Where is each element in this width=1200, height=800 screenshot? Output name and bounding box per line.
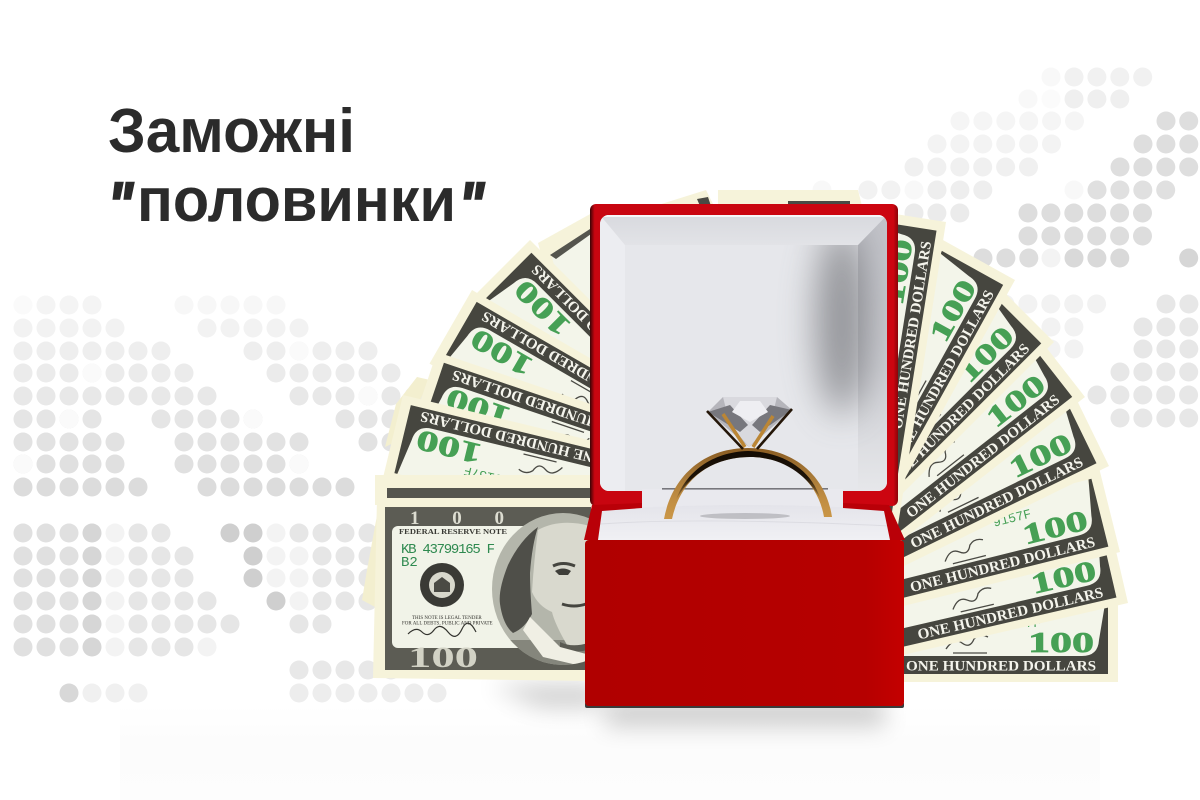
treasury seal — [420, 563, 464, 607]
bottom big 100: 100 — [408, 641, 478, 674]
bill: left fan note 4 — [430, 290, 766, 534]
serial number: KB 43799165 F — [401, 542, 495, 558]
bill: left fan note 3 — [410, 352, 759, 542]
signature — [408, 623, 476, 636]
bill: left top partial note — [538, 213, 592, 320]
dots: western map area, lower rows — [23, 533, 438, 693]
title: " — [459, 171, 485, 240]
diamond — [707, 397, 792, 449]
dots: western map area, upper rows — [23, 305, 415, 487]
bill: left fan note 2 — [383, 395, 733, 558]
portrait of Franklin — [492, 513, 589, 665]
dots: eastern map area — [822, 77, 1190, 418]
box rim — [584, 503, 905, 540]
title — [108, 97, 485, 240]
ring — [664, 397, 832, 519]
bill: front hundred dollar note with portrait — [373, 498, 600, 681]
ring band — [664, 448, 832, 519]
dollar bills fan: behind the box — [362, 190, 1128, 682]
bills: slanted under-notes on the left — [362, 377, 430, 607]
bills: top edge behind lid — [655, 190, 862, 206]
series code: B2 — [401, 555, 418, 571]
box drop shadow — [490, 686, 885, 726]
dotted world map background — [23, 77, 1190, 693]
note caption: FEDERAL RESERVE NOTE — [399, 528, 507, 536]
title: Заможні — [108, 97, 355, 166]
box front — [585, 540, 904, 708]
background floor shadow — [120, 705, 1100, 800]
title: половинки — [137, 166, 456, 235]
bill: rear note behind the front note — [375, 475, 595, 505]
box lid — [590, 204, 898, 506]
bill: right fan notes, bottom to top — [753, 209, 1128, 682]
title: " — [108, 171, 134, 240]
legal tender text: THIS NOTE IS LEGAL TENDER — [412, 616, 482, 621]
cushion — [598, 488, 890, 540]
bill: left fan note 5 — [470, 240, 770, 541]
legal tender text: FOR ALL DEBTS, PUBLIC AND PRIVATE — [402, 622, 493, 626]
note header 100: 100 — [410, 508, 504, 529]
jewellery box — [584, 204, 905, 708]
